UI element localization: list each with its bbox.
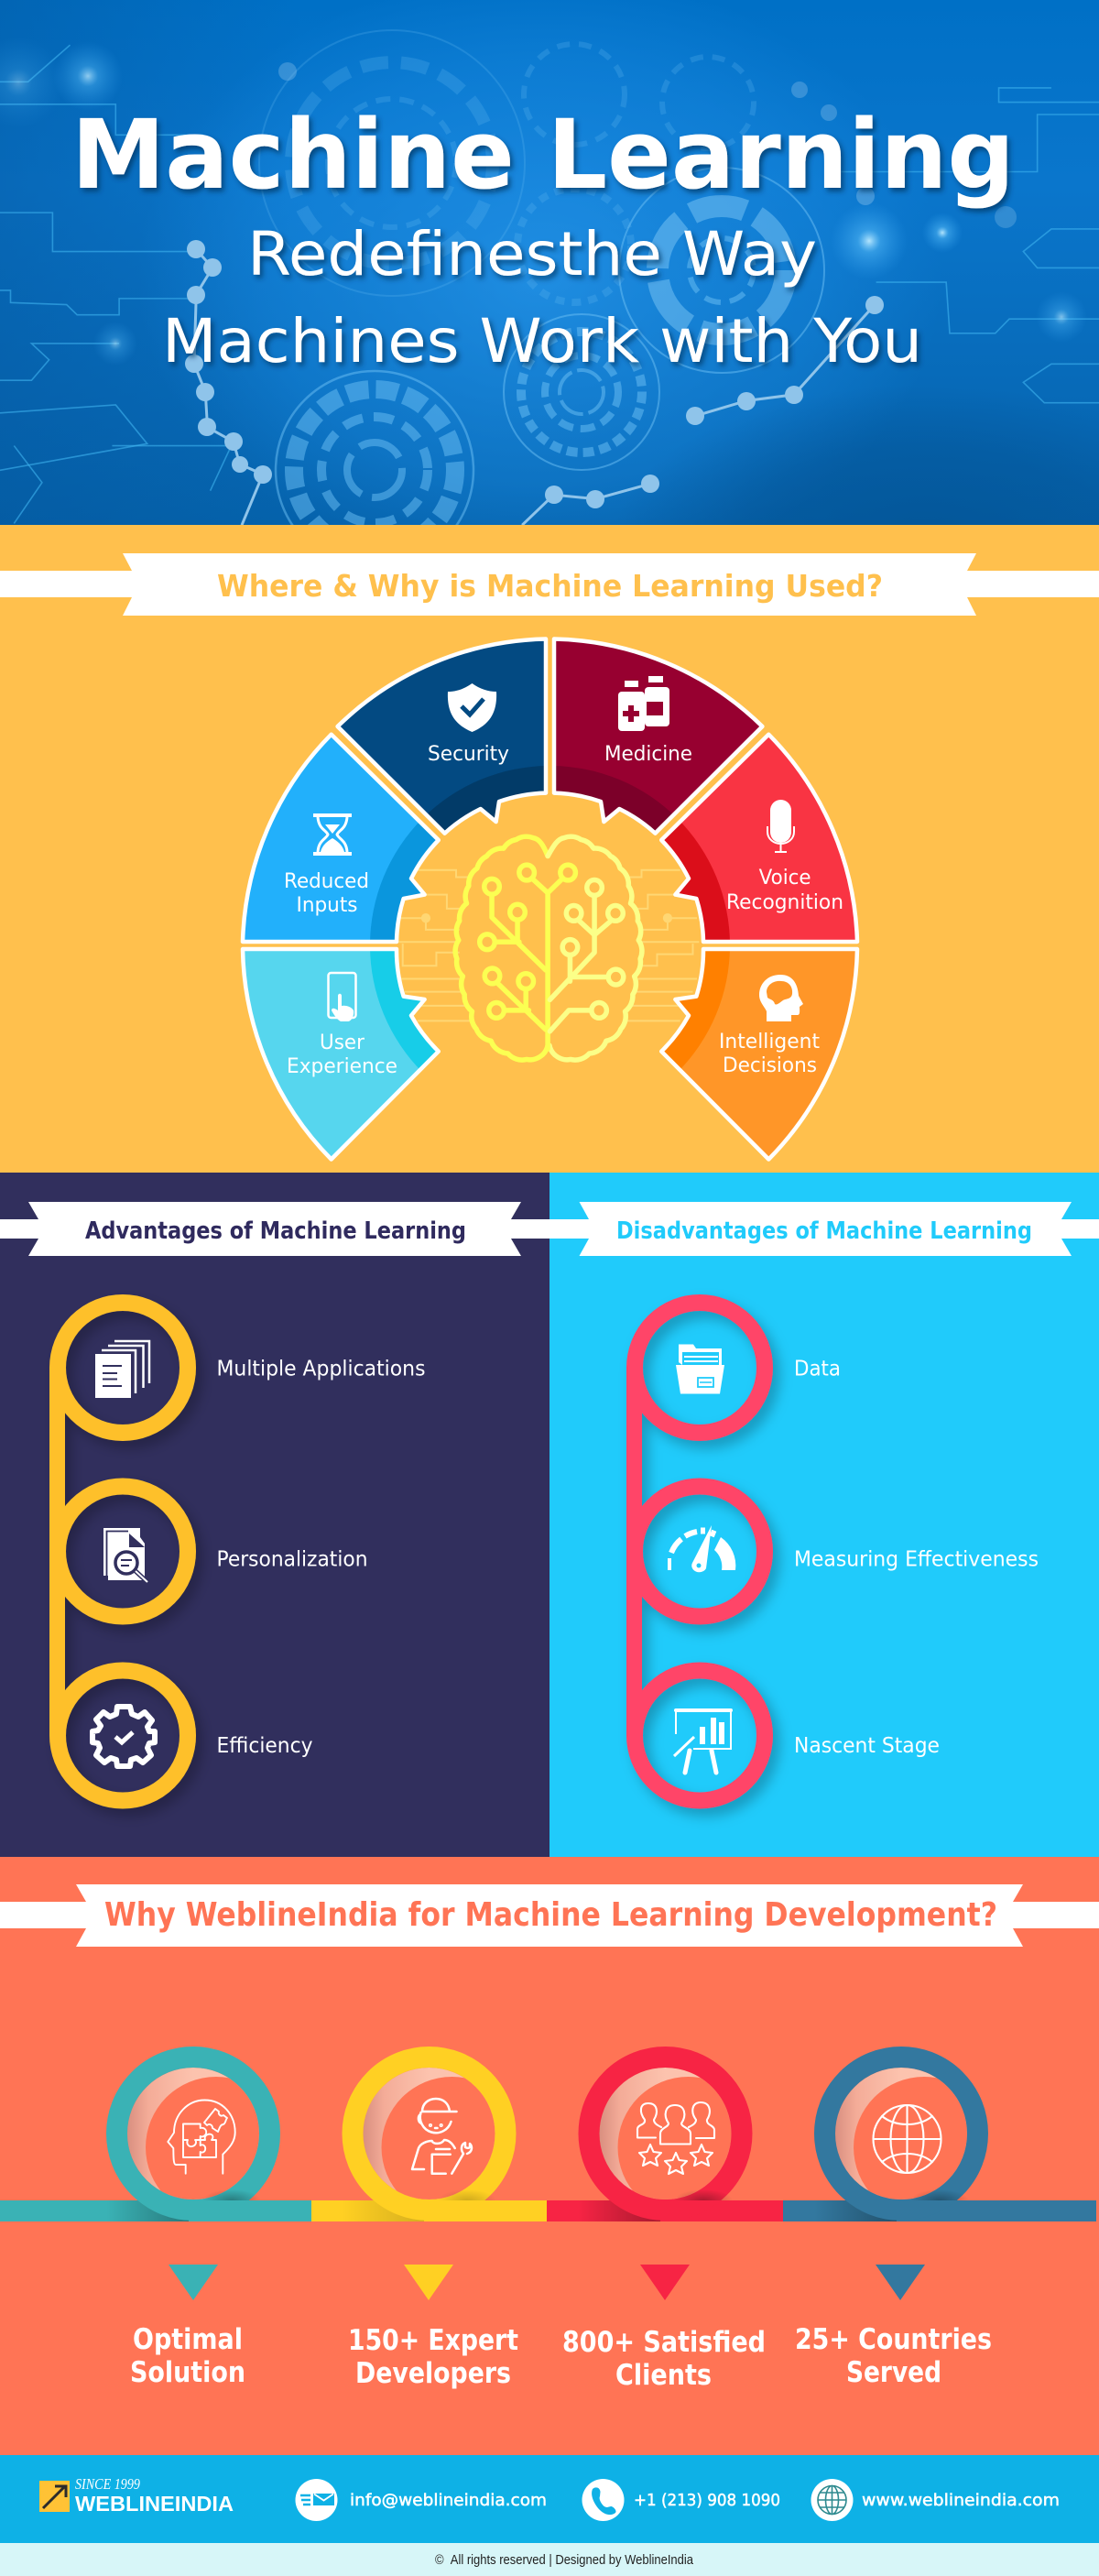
ribbon heading: advantages [0, 1202, 550, 1256]
title: Machine Learning [71, 99, 1015, 211]
ring: optimal solution [0, 2058, 311, 2221]
segment: reduced inputs: Reduced [284, 870, 369, 893]
stat labels: 150+ Expert [348, 2324, 518, 2357]
segment: reduced inputs [240, 733, 441, 944]
title: Redefinesthe Way [247, 219, 817, 289]
title [71, 99, 1015, 377]
contact: email: info@weblineindia.com [350, 2491, 547, 2510]
segment: user experience: User [320, 1031, 365, 1054]
panel: advantages: Multiple Applications [216, 1358, 425, 1381]
panel: advantages: Personalization [216, 1548, 368, 1572]
icon: touch phone [328, 973, 355, 1021]
header panel with circuit background [0, 0, 1099, 525]
ring: satisfied clients [547, 2058, 783, 2221]
segment: reduced inputs: Inputs [297, 894, 357, 917]
logo: WEBLINEINDIA [75, 2492, 234, 2516]
icon: document search [103, 1528, 147, 1582]
copyright bar: © All rights reserved | Designed by WeblineIndia [435, 2552, 694, 2568]
segment: voice recognition: Recognition [726, 891, 843, 914]
segment: user experience [240, 947, 441, 1162]
contact: website [811, 2479, 1060, 2521]
icon: worker [412, 2099, 472, 2174]
ring: countries served [783, 2058, 1096, 2221]
stat labels: Clients [615, 2359, 712, 2392]
stat labels: Optimal [133, 2323, 243, 2356]
contact: website: www.weblineindia.com [862, 2491, 1060, 2510]
icon: medicine bottles [618, 676, 669, 731]
segment: intelligent decisions [659, 947, 859, 1162]
segment: medicine: Medicine [604, 743, 692, 766]
ring: expert developers [311, 2058, 547, 2221]
panel: why weblineindia [0, 1857, 1099, 2455]
stat labels: Developers [355, 2357, 511, 2390]
ribbon heading: why weblineindia [0, 1884, 1099, 1947]
panel: disadvantages: Nascent Stage [794, 1734, 940, 1758]
contact: phone: +1 (213) 908 1090 [634, 2491, 780, 2510]
icon: head with brain [759, 975, 803, 1021]
stat labels: Served [846, 2356, 941, 2389]
arrow markers [169, 2265, 925, 2300]
logo: SINCE 1999 [75, 2475, 140, 2493]
brain circuit traces [398, 870, 699, 1021]
logo [39, 2475, 234, 2516]
icon: shield [448, 683, 496, 732]
icon: microphone [767, 800, 794, 852]
icon: globe [874, 2105, 941, 2173]
icon: presentation board [674, 1708, 733, 1773]
segment: security [335, 637, 548, 835]
ribbon heading: advantages: Advantages of Machine Learning [85, 1217, 466, 1245]
panel: disadvantages [550, 1173, 1099, 1857]
contact: email [295, 2479, 547, 2521]
panel: where and why [0, 525, 1099, 1173]
icon: folder [676, 1345, 724, 1394]
ribbon heading: disadvantages [550, 1202, 1099, 1256]
ribbon heading: where and why: Where & Why is Machine Learning Used? [217, 568, 883, 604]
segment: security: Security [428, 743, 509, 766]
stat labels: Solution [130, 2356, 245, 2389]
panel: disadvantages: Measuring Effectiveness [794, 1548, 1039, 1572]
panel: advantages: Efficiency [216, 1734, 313, 1758]
segment: medicine [551, 637, 765, 835]
panel: disadvantages: Data [794, 1358, 841, 1381]
segment: voice recognition [659, 733, 859, 944]
icon: head puzzle [168, 2100, 235, 2174]
stat labels: 800+ Satisfied [562, 2326, 766, 2359]
stat labels [130, 2323, 992, 2392]
icon: brain [455, 836, 642, 1060]
segment: voice recognition: Voice [759, 867, 811, 890]
connected rings: advantages [49, 1303, 188, 1801]
connected rings: disadvantages [626, 1303, 765, 1801]
icon: gear check [92, 1707, 155, 1766]
title: Machines Work with You [162, 306, 922, 377]
contact: phone [582, 2479, 780, 2521]
copyright bar [0, 2543, 1099, 2576]
ribbon heading: disadvantages: Disadvantages of Machine Learning [616, 1217, 1032, 1245]
icon: people and stars [637, 2102, 714, 2174]
panel: advantages [0, 1173, 550, 1857]
icon: documents [95, 1341, 149, 1398]
stat labels: 25+ Countries [795, 2323, 992, 2356]
footer contact bar [0, 2455, 1099, 2543]
segment: intelligent decisions: Intelligent [719, 1031, 820, 1053]
icon: hourglass [313, 813, 352, 856]
ribbon heading: why weblineindia: Why WeblineIndia for Machine Learning Development? [104, 1896, 997, 1934]
icon: gauge [669, 1525, 735, 1572]
segment: intelligent decisions: Decisions [723, 1054, 817, 1077]
ribbon heading: where and why [0, 553, 1099, 616]
segment: user experience: Experience [287, 1055, 397, 1078]
